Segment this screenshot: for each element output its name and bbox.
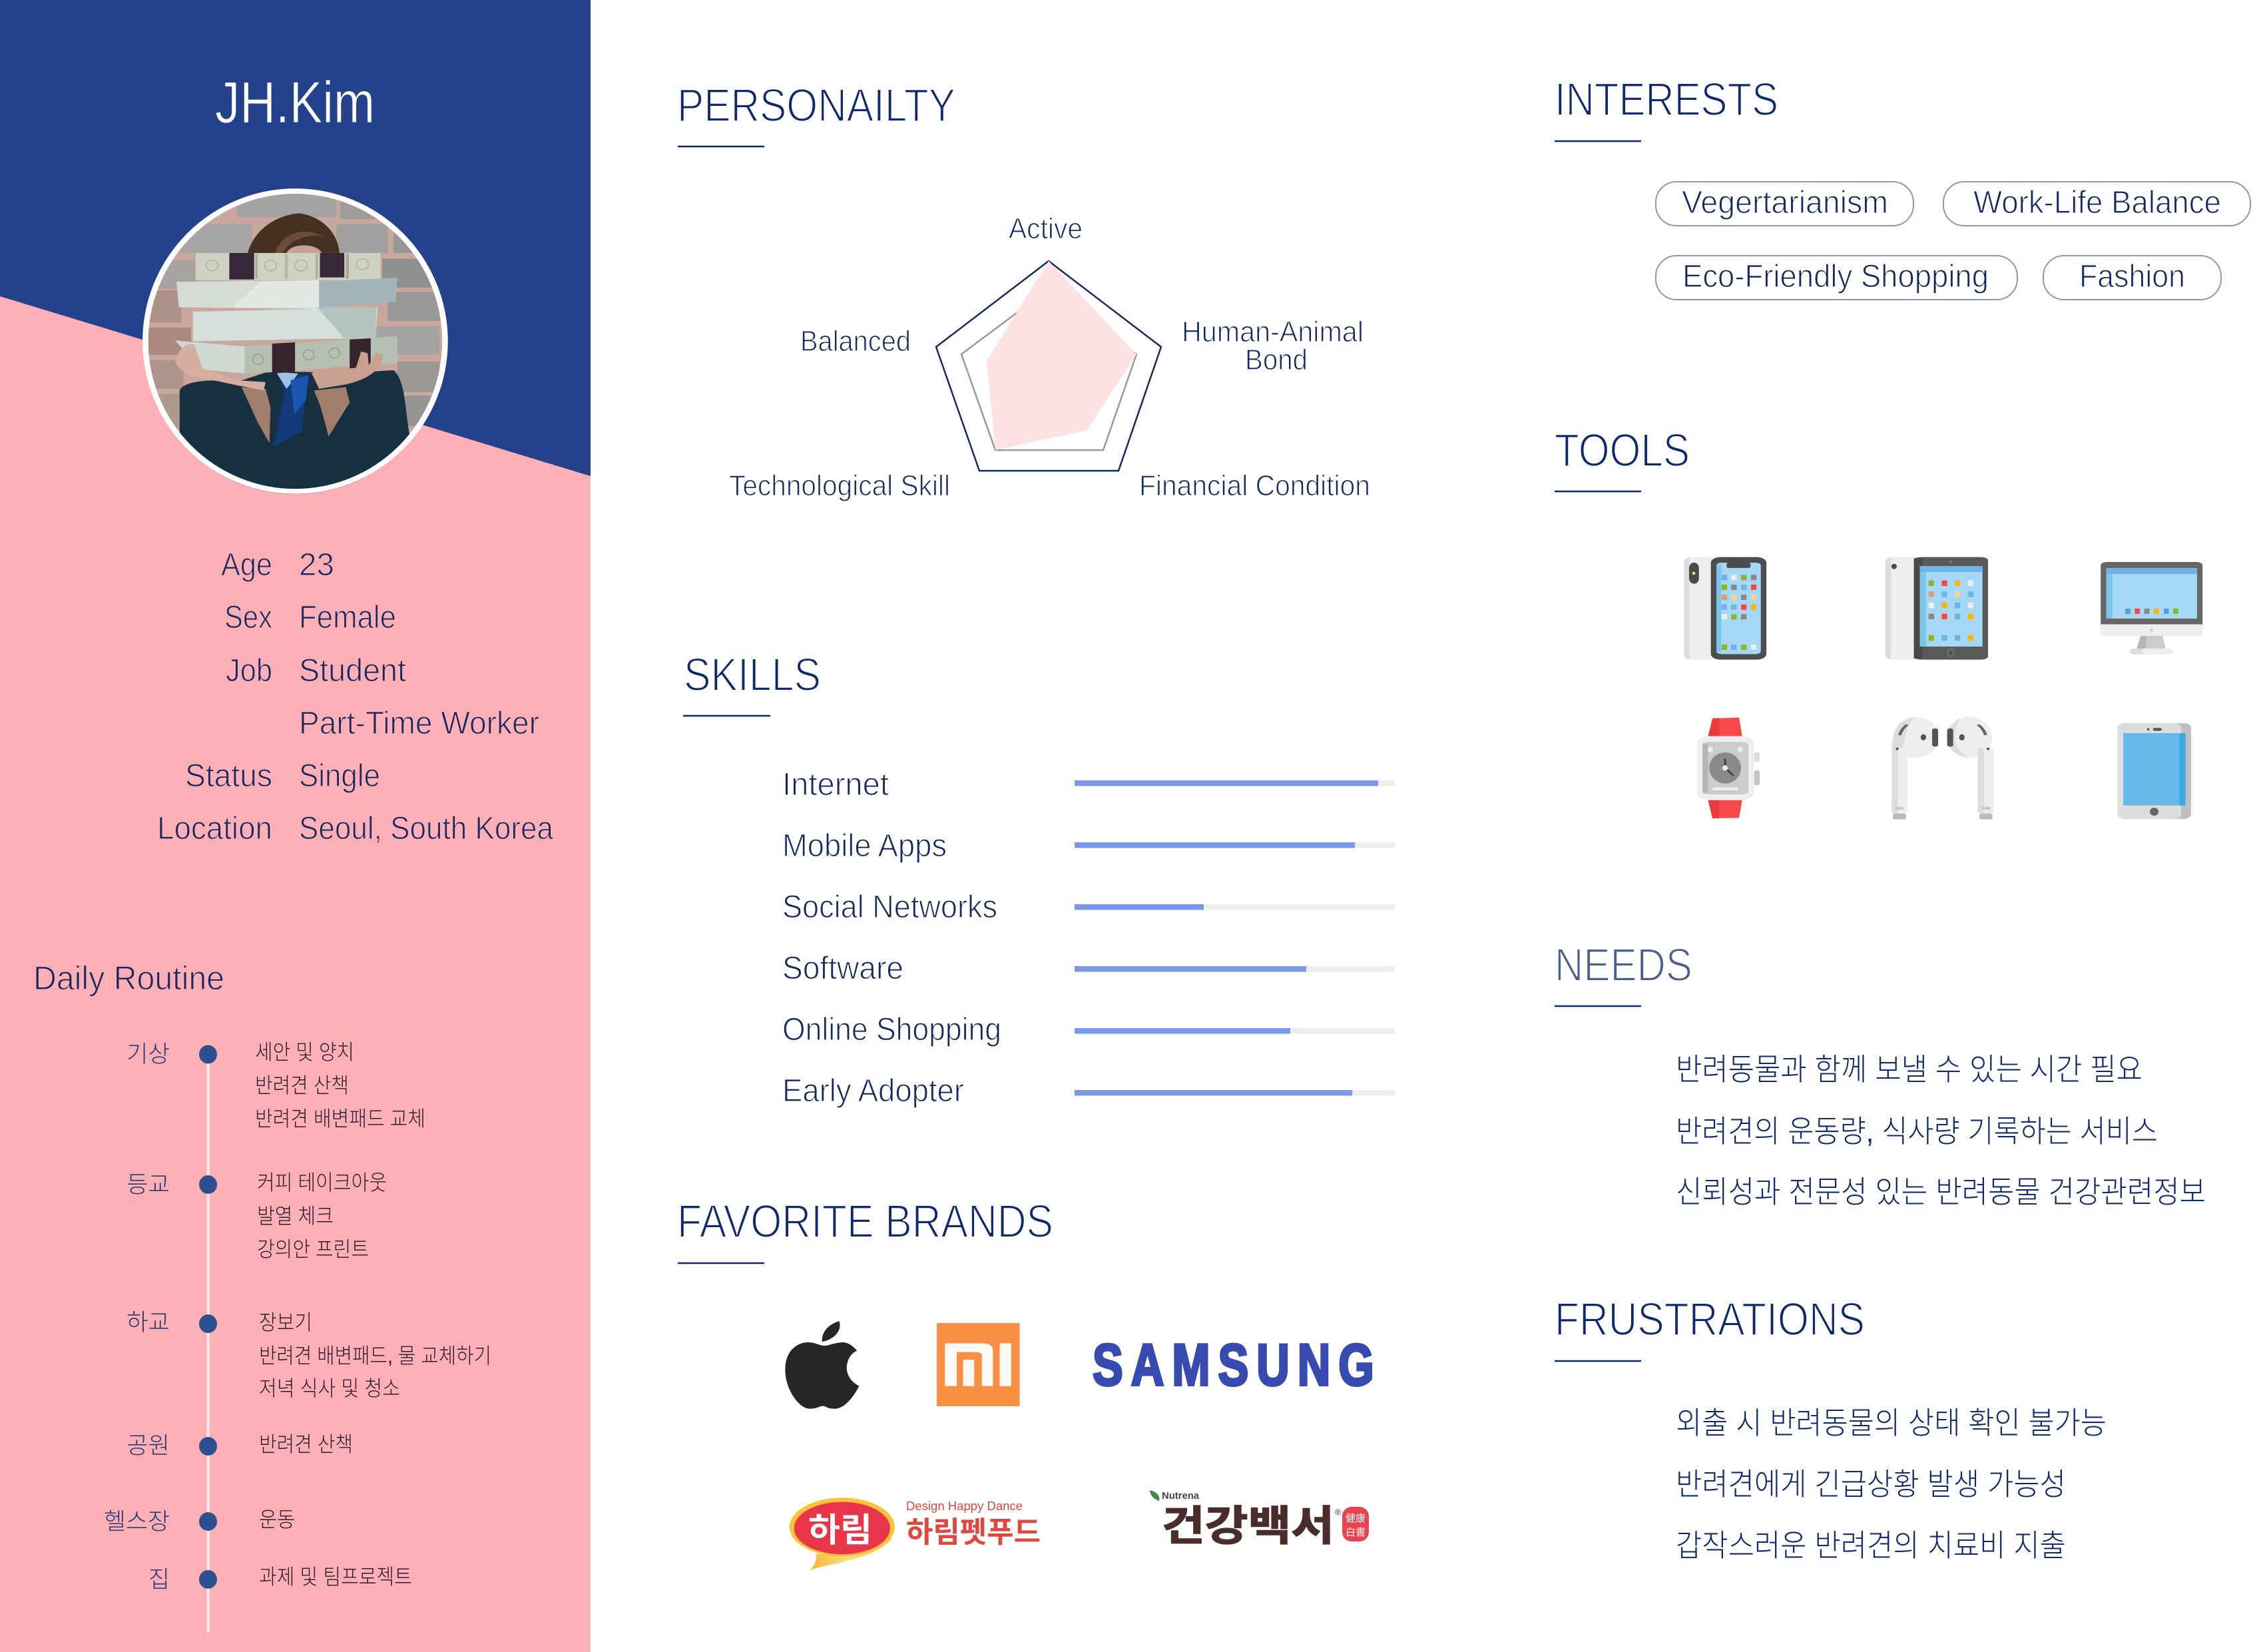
skill: social networks: Social Networks <box>782 890 997 925</box>
name heading: JH.Kim <box>215 69 375 135</box>
personal details list: Student <box>299 653 406 688</box>
personal details list: 23 <box>299 547 334 583</box>
personal details list: Single <box>299 758 380 794</box>
panel: frustrations <box>1555 1293 2107 1563</box>
radar chart: Active <box>1009 212 1083 245</box>
timeline: daily routine: 반려견 배변패드, 물 교체하기 <box>259 1344 491 1368</box>
tag: fashion <box>2043 256 2221 300</box>
personal details list: Job <box>226 653 272 688</box>
timeline: daily routine: 하교 <box>126 1310 170 1336</box>
books <box>196 253 381 280</box>
tag: work-life balance: Work-Life Balance <box>1973 185 2221 220</box>
panel: skills <box>683 649 1395 1109</box>
logo: nutrena health white paper: 건강백서 <box>1162 1504 1334 1549</box>
logo: nutrena health white paper: 白書 <box>1346 1527 1366 1538</box>
radar chart: Human-Animal <box>1182 316 1364 348</box>
tag: work-life balance <box>1943 182 2250 226</box>
timeline: daily routine: 집 <box>148 1567 170 1593</box>
timeline: daily routine: 등교 <box>126 1172 170 1198</box>
icon: wireless earbuds <box>1891 717 1993 820</box>
timeline: daily routine: 헬스장 <box>104 1509 170 1535</box>
heading: personality: PERSONAILTY <box>677 79 955 131</box>
personal details list: Status <box>185 758 272 794</box>
frustrations list: 반려견에게 긴급상황 발생 가능성 <box>1676 1467 2066 1502</box>
skill: early adopter <box>782 1073 1395 1109</box>
frustrations list: 외출 시 반려동물의 상태 확인 불가능 <box>1676 1406 2107 1440</box>
timeline: daily routine <box>104 1040 491 1633</box>
radar chart: Balanced <box>800 325 911 358</box>
needs list: 반려견의 운동량, 식사량 기록하는 서비스 <box>1676 1114 2158 1149</box>
logo: nutrena health white paper: Nutrena <box>1162 1490 1200 1502</box>
panel: needs <box>1555 939 2206 1209</box>
panel: personality <box>677 79 1370 502</box>
tag: vegetarianism <box>1656 182 1913 226</box>
radar chart: Bond <box>1245 344 1308 376</box>
timeline: daily routine: 반려견 산책 <box>255 1073 349 1097</box>
logo: apple and xiaomi <box>785 1321 1020 1409</box>
heading: interests: INTERESTS <box>1555 73 1778 125</box>
timeline: daily routine: 저녁 식사 및 청소 <box>259 1376 400 1400</box>
hands <box>175 344 266 390</box>
heading: favorite brands: FAVORITE BRANDS <box>677 1195 1053 1247</box>
logo: harim pet food <box>790 1498 1041 1570</box>
timeline: daily routine: 강의안 프린트 <box>257 1237 369 1261</box>
logo: nutrena health white paper <box>1150 1490 1369 1549</box>
timeline: daily routine: 장보기 <box>259 1310 312 1334</box>
panel: favorite brands <box>677 1195 1374 1570</box>
skill: online shopping: Online Shopping <box>782 1012 1001 1047</box>
icon: smartphone with notch <box>1684 557 1766 660</box>
skill: early adopter: Early Adopter <box>782 1073 964 1109</box>
frustrations list <box>1676 1406 2107 1563</box>
icon: desktop monitor <box>2101 562 2202 655</box>
skill: social networks <box>782 890 1395 925</box>
panel: interests <box>1555 73 2250 300</box>
timeline: daily routine: 반려견 산책 <box>259 1432 353 1456</box>
skill: mobile apps: Mobile Apps <box>782 828 947 864</box>
icon: phone front <box>2118 723 2191 819</box>
radar chart: Technological Skill <box>729 469 950 502</box>
logo: nutrena health white paper: 健康 <box>1346 1513 1366 1524</box>
heading: tools: TOOLS <box>1555 424 1690 476</box>
panel: tools <box>1555 424 2202 820</box>
logo: harim pet food: 하림 <box>808 1512 872 1549</box>
hair <box>248 213 340 253</box>
needs list: 반려동물과 함께 보낼 수 있는 시간 필요 <box>1676 1052 2142 1087</box>
radar chart: Financial Condition <box>1139 469 1370 502</box>
tag: eco-friendly shopping: Eco-Friendly Shopping <box>1682 259 1989 294</box>
timeline: daily routine: 기상 <box>126 1041 170 1067</box>
skill: online shopping <box>782 1012 1395 1047</box>
skill: internet: Internet <box>782 767 889 802</box>
icon: smartwatch <box>1697 718 1760 818</box>
tag: fashion: Fashion <box>2079 259 2185 294</box>
skill: internet <box>782 767 1395 802</box>
timeline: daily routine: 발열 체크 <box>257 1204 334 1228</box>
personal details list <box>157 547 553 846</box>
personal details list: Location <box>157 811 272 846</box>
timeline: daily routine: 과제 및 팀프로젝트 <box>259 1565 412 1589</box>
tag: vegetarianism: Vegertarianism <box>1682 185 1888 220</box>
panel: profile sidebar <box>0 0 591 1652</box>
logo: harim pet food: 하림펫푸드 <box>906 1516 1041 1549</box>
heading: daily routine: Daily Routine <box>33 960 224 997</box>
icon: tablet <box>1885 557 1988 660</box>
radar chart <box>729 212 1370 502</box>
timeline: daily routine: 운동 <box>259 1508 295 1531</box>
timeline: daily routine: 커피 테이크아웃 <box>257 1171 387 1195</box>
personal details list: Seoul, South Korea <box>299 811 553 846</box>
logo: nutrena health white paper: ® <box>1335 1508 1341 1517</box>
skill: software: Software <box>782 951 903 986</box>
heading: frustrations: FRUSTRATIONS <box>1555 1293 1865 1345</box>
skill: mobile apps <box>782 828 1395 864</box>
needs list <box>1676 1052 2206 1209</box>
personal details list: Part-Time Worker <box>299 706 539 741</box>
timeline: daily routine: 공원 <box>126 1433 170 1459</box>
heading: needs: NEEDS <box>1555 939 1692 991</box>
timeline: daily routine: 세안 및 양치 <box>255 1040 354 1064</box>
personal details list: Female <box>299 600 396 635</box>
needs list: 신뢰성과 전문성 있는 반려동물 건강관련정보 <box>1676 1175 2206 1209</box>
skill: software <box>782 951 1395 986</box>
heading: skills: SKILLS <box>684 649 821 700</box>
personal details list: Sex <box>224 600 272 635</box>
logo: samsung: SAMSUNG <box>1093 1332 1374 1398</box>
timeline: daily routine: 반려견 배변패드 교체 <box>255 1107 425 1131</box>
profile photo: person holding books <box>138 183 455 503</box>
personal details list: Age <box>221 547 272 583</box>
logo: harim pet food: Design Happy Dance <box>906 1500 1023 1513</box>
jacket <box>180 370 411 494</box>
frustrations list: 갑작스러운 반려견의 치료비 지출 <box>1676 1528 2066 1563</box>
